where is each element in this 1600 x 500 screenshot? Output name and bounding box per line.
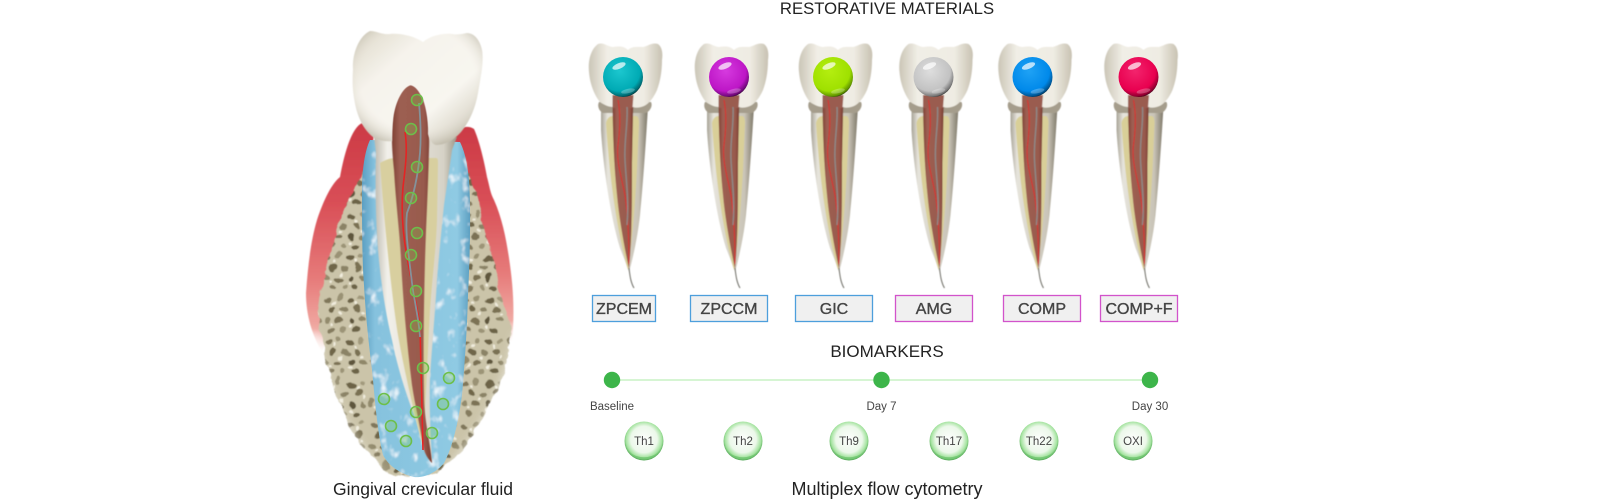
biomarker: Th2 bbox=[724, 422, 762, 460]
timepoint: Baseline: Baseline bbox=[590, 401, 634, 413]
panel: biomarker bubbles bbox=[624, 422, 1152, 460]
tooth: GIC bbox=[799, 43, 872, 288]
label: ZPCCM bbox=[690, 296, 768, 322]
gum tissue bbox=[306, 123, 513, 352]
label: ZPCEM bbox=[592, 296, 656, 322]
tooth: COMP bbox=[998, 43, 1072, 288]
label: ZPCCM: ZPCCM bbox=[701, 301, 757, 318]
biomarker: Th17 bbox=[930, 422, 968, 460]
panel: restorative material teeth bbox=[589, 43, 1178, 288]
biomarker: OXI: OXI bbox=[1123, 436, 1143, 448]
timeline bbox=[590, 372, 1168, 413]
timepoint: Baseline bbox=[590, 372, 634, 413]
biomarker particles bbox=[378, 94, 454, 446]
tooth: ZPCEM bbox=[589, 43, 662, 288]
tooth root bbox=[374, 136, 457, 463]
biomarker: Th22 bbox=[1020, 422, 1058, 460]
biomarker: Th1: Th1 bbox=[634, 436, 654, 448]
timepoint: Day 30 bbox=[1132, 372, 1168, 413]
biomarker: Th2: Th2 bbox=[733, 436, 753, 448]
biomarker: Th9: Th9 bbox=[839, 436, 859, 448]
biomarker: OXI bbox=[1114, 422, 1152, 460]
tooth: COMP+F bbox=[1104, 43, 1178, 288]
caption: multiplex flow cytometry: Multiplex flow cytometry bbox=[791, 479, 983, 499]
label: GIC bbox=[796, 296, 872, 322]
timepoint: Day 30: Day 30 bbox=[1132, 401, 1168, 413]
heading: biomarkers: BIOMARKERS bbox=[830, 342, 944, 361]
label: ZPCEM: ZPCEM bbox=[596, 301, 652, 318]
label: GIC: GIC bbox=[820, 301, 848, 318]
label: COMP+F: COMP+F bbox=[1105, 301, 1173, 318]
panel: material labels bbox=[592, 296, 1178, 322]
dental pulp bbox=[392, 85, 432, 463]
biomarker: Th1 bbox=[624, 422, 664, 460]
nerves and vessels bbox=[402, 103, 423, 450]
caption: gingival crevicular fluid: Gingival crevicular fluid bbox=[333, 479, 513, 499]
label: COMP+F bbox=[1100, 296, 1178, 322]
alveolar bone bbox=[310, 172, 522, 484]
timepoint: Day 7 bbox=[866, 372, 897, 413]
label: COMP bbox=[1004, 296, 1080, 322]
label: AMG: AMG bbox=[916, 301, 952, 318]
crevicular fluid bbox=[362, 140, 470, 477]
biomarker: Th17: Th17 bbox=[936, 436, 962, 448]
dentine bbox=[380, 158, 438, 447]
label: AMG bbox=[896, 296, 972, 322]
biomarker: Th22: Th22 bbox=[1026, 436, 1052, 448]
tooth crown bbox=[353, 31, 483, 145]
tooth: AMG bbox=[899, 43, 973, 288]
label: COMP: COMP bbox=[1018, 301, 1066, 318]
tooth: ZPCCM bbox=[695, 43, 768, 288]
timepoint: Day 7: Day 7 bbox=[866, 401, 897, 413]
biomarker: Th9 bbox=[830, 422, 868, 460]
illustration: large tooth with gingival crevicular fluid bbox=[306, 31, 522, 484]
